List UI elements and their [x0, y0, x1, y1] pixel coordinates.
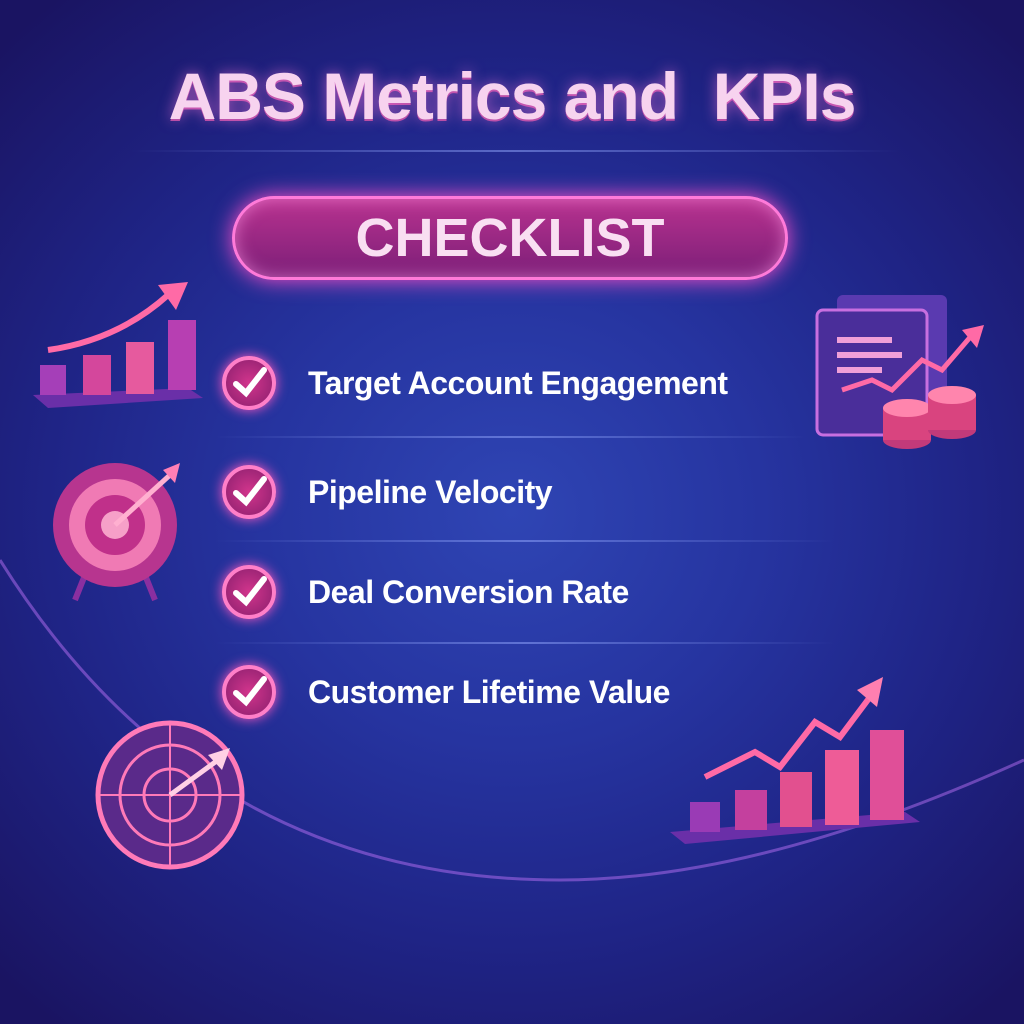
label: Target Account Engagement	[308, 365, 728, 401]
title: ABS Metrics and KPIs	[169, 59, 855, 133]
icon: document with coins	[816, 295, 984, 449]
check icon	[222, 465, 276, 519]
item: deal conversion rate	[212, 556, 629, 628]
icon: target	[53, 463, 180, 602]
item: pipeline velocity	[212, 456, 552, 528]
label: Customer Lifetime Value	[308, 674, 670, 710]
item: customer lifetime value	[212, 656, 670, 728]
label: Deal Conversion Rate	[308, 574, 629, 610]
icon: bottom right bar chart	[670, 677, 920, 844]
checklist pill	[232, 196, 788, 280]
icon: left bar chart	[33, 282, 203, 408]
label: Pipeline Velocity	[308, 474, 552, 510]
check icon	[222, 356, 276, 410]
checklist pill: CHECKLIST	[356, 208, 664, 268]
check icon	[222, 665, 276, 719]
icon: radar	[96, 720, 244, 870]
item: target account engagement	[212, 346, 728, 420]
check icon	[222, 565, 276, 619]
